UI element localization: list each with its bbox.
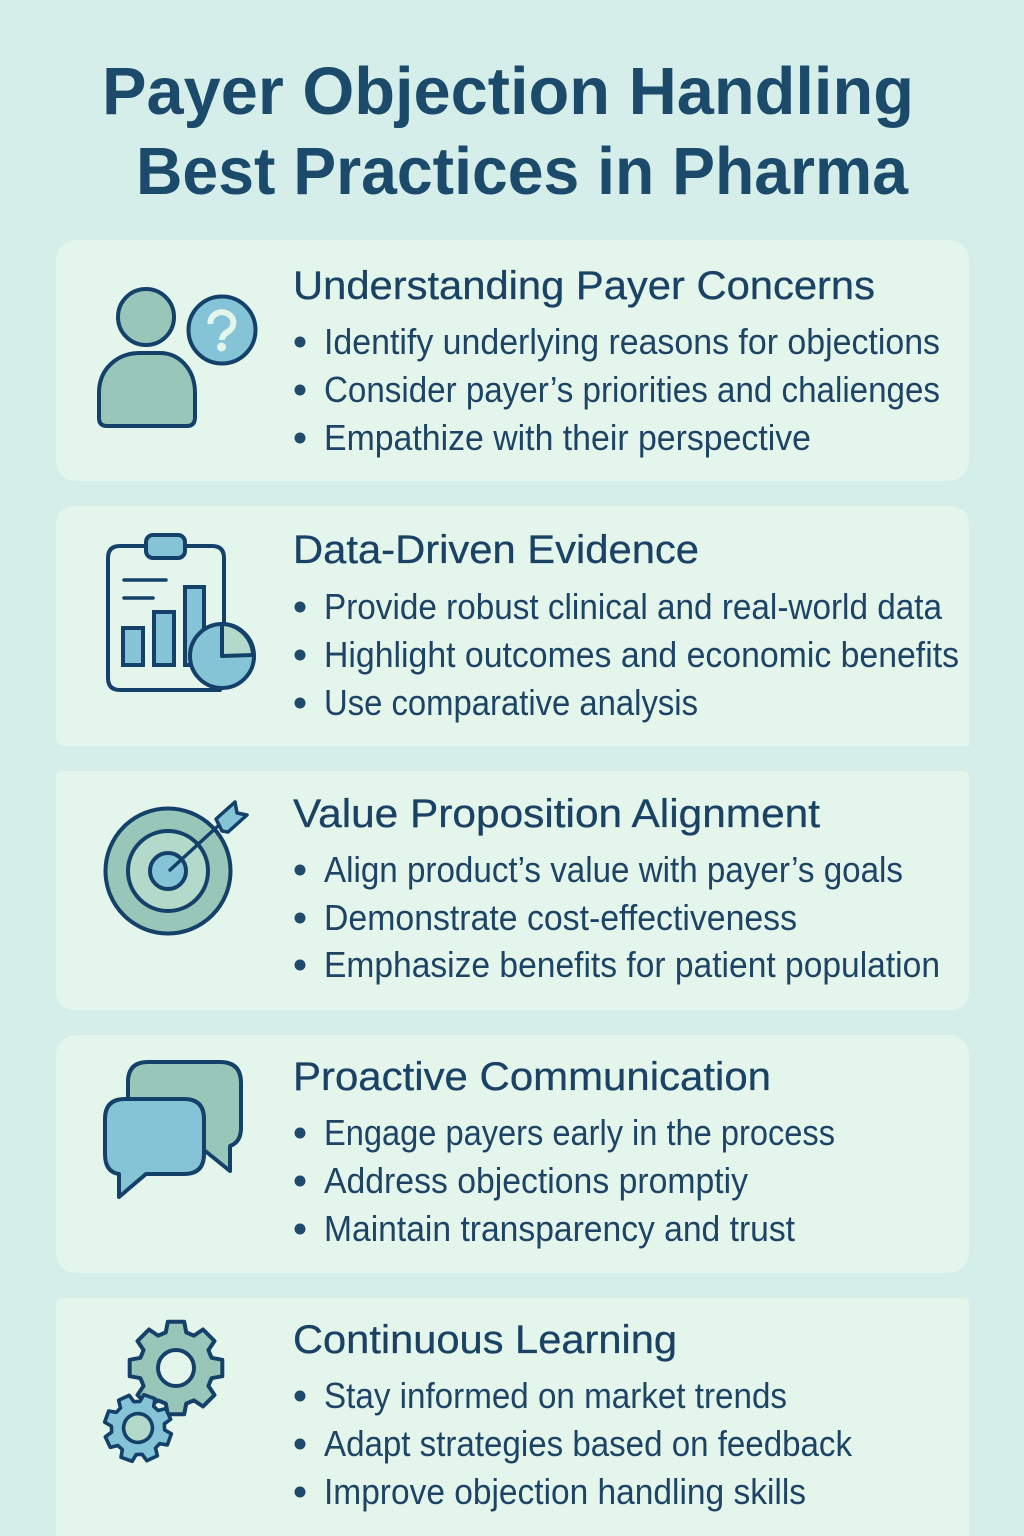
icon: clipboard with charts [108,535,254,690]
panel: continuous learning [56,1298,969,1536]
bullet list: Align product’s value with payer’s goals [324,849,903,890]
bullet list [294,586,959,723]
panel: value proposition alignment [56,771,969,1010]
title: Payer Objection Handling [102,54,914,129]
bullet list [294,1375,853,1512]
bullet list: Demonstrate cost-effectiveness [324,897,797,938]
bullet list: Consider payer’s priorities and chalienges [324,369,940,410]
bullet list: Empathize with their perspective [324,417,811,458]
heading: Understanding Payer Concerns [293,264,875,308]
bullet list: Stay informed on market trends [324,1375,787,1416]
heading: Data-Driven Evidence [293,528,699,572]
title [102,54,914,209]
bullet list: Adapt strategies based on feedback [324,1423,853,1464]
heading: Continuous Learning [293,1318,677,1362]
icon: target with arrow [106,802,247,934]
bullet list [294,1112,835,1249]
bullet list: Use comparative analysis [324,682,698,723]
icon: person with question mark [99,289,256,426]
panel: understanding payer concerns [56,240,969,481]
bullet list: Highlight outcomes and economic benefits [324,634,959,675]
bullet list: Provide robust clinical and real-world data [324,586,943,627]
panel: data-driven evidence [56,506,969,746]
icon: gears [95,1322,222,1471]
panel: proactive communication [56,1035,969,1273]
bullet list: Emphasize benefits for patient population [324,944,940,985]
bullet list: Improve objection handling skills [324,1471,806,1512]
bullet list: Address objections promptiy [324,1160,748,1201]
bullet list: Maintain transparency and trust [324,1208,795,1249]
bullet list [294,321,940,458]
heading: Value Proposition Alignment [293,792,820,836]
heading: Proactive Communication [293,1055,771,1099]
title: Best Practices in Pharma [136,134,909,209]
bullet list [294,849,940,985]
bullet list: Identify underlying reasons for objections [324,321,940,362]
bullet list: Engage payers early in the process [324,1112,835,1153]
icon: speech bubbles [105,1062,241,1197]
